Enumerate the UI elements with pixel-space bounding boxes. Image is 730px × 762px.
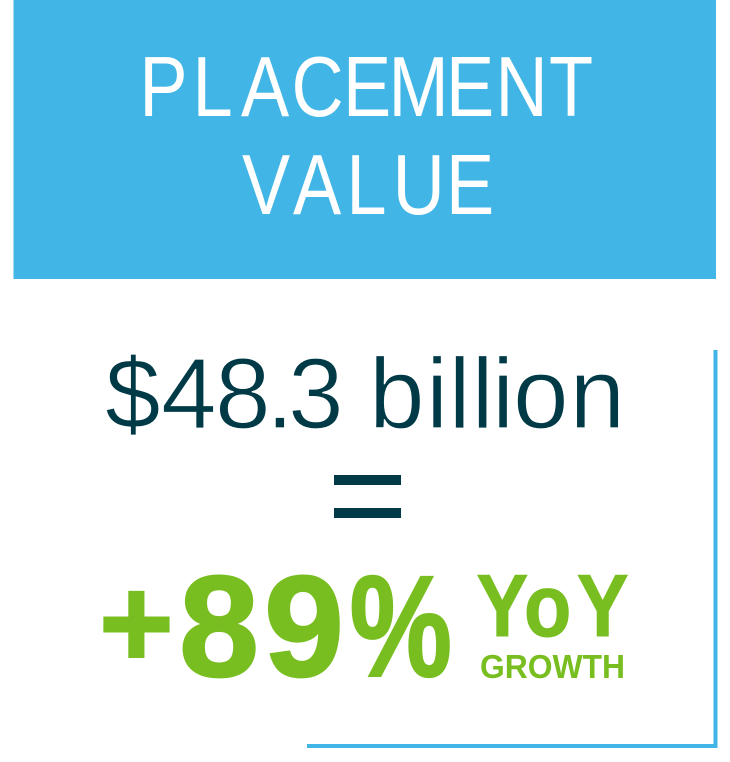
heading: placement value [139, 39, 593, 232]
growth figure: +89% [99, 546, 452, 707]
growth figure: +89%: 89 [179, 546, 344, 707]
heading: placement value: PLACEMENT [139, 39, 593, 134]
corner frame [307, 350, 716, 746]
label: growth: GROWTH [480, 648, 625, 685]
growth figure: +89%: + [99, 552, 174, 695]
header panel [14, 0, 716, 279]
value: $48.3 billion: $48.3 billion [105, 338, 625, 450]
equals sign [334, 475, 401, 518]
label: YoY: YoY [477, 556, 628, 655]
heading: placement value: VALUE [242, 137, 494, 232]
growth figure: +89%: % [350, 546, 452, 707]
